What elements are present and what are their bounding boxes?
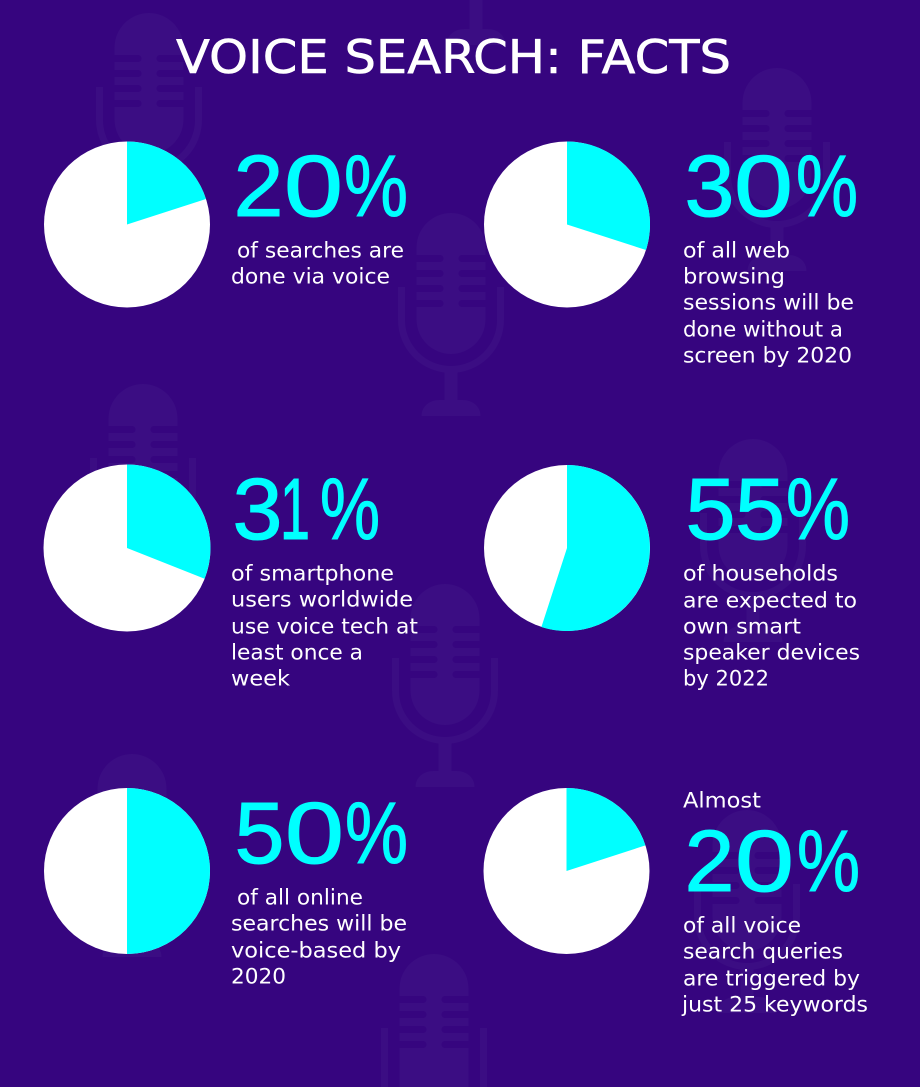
- description: smartphone users: of smartphone: [231, 562, 394, 587]
- description: voice-based searches: [231, 886, 407, 990]
- description: smartphone users: [231, 562, 418, 692]
- description: smart speakers: speaker devices: [683, 641, 860, 666]
- stat: 55%: %: [786, 461, 850, 558]
- description: keywords: search queries: [683, 940, 843, 965]
- lead-in: Almost: Almost: [683, 789, 761, 814]
- description: keywords: are triggered by: [683, 967, 860, 992]
- title: VOICE SEARCH: FACTS: [176, 30, 731, 84]
- pie chart: 55%: [484, 465, 650, 631]
- panel: 20% of searches: [44, 138, 408, 308]
- description: screenless browsing: screen by 2020: [683, 344, 852, 369]
- stat: 31%: %: [320, 461, 380, 558]
- description: voice-based searches: voice-based by: [231, 939, 401, 964]
- description: smart speakers: of households: [683, 562, 838, 587]
- description: smartphone users: use voice tech at: [231, 615, 418, 640]
- stat: 20% of queries: 2: [684, 813, 734, 910]
- stat: 50%: %: [345, 785, 408, 882]
- description: smart speakers: [683, 562, 860, 692]
- stat: 20%: 2: [234, 138, 284, 235]
- stat: 31%: 3: [232, 461, 282, 558]
- stat: 30%: 3: [684, 138, 734, 235]
- description: keywords: just 25 keywords: [681, 993, 868, 1018]
- stat: 20% of queries: 0: [735, 813, 794, 910]
- stat: 50%: 0: [285, 785, 344, 882]
- stat: 30%: %: [796, 138, 858, 235]
- description: smart speakers: own smart: [683, 615, 801, 640]
- description: smart speakers: are expected to: [683, 589, 857, 614]
- description: screenless browsing: done without a: [683, 318, 843, 343]
- description: screenless browsing: of all web: [683, 239, 790, 264]
- description: smartphone users: week: [231, 667, 291, 692]
- description: voice-based searches: of all online: [237, 886, 363, 911]
- description: keywords: of all voice: [683, 914, 801, 939]
- description: voice-based searches: 2020: [231, 965, 286, 990]
- pie chart: 20% of queries: [484, 788, 650, 954]
- stat: 30%: 0: [734, 138, 793, 235]
- description: screenless browsing: browsing: [683, 265, 785, 290]
- panel: 30% of web browsing: [484, 138, 858, 369]
- description: searches via voice: done via voice: [231, 265, 390, 290]
- description: keywords: [681, 914, 868, 1018]
- description: voice-based searches: searches will be: [231, 912, 407, 937]
- stat: 31%: 1: [280, 461, 310, 558]
- pie chart: 30%: [484, 142, 650, 308]
- pie chart: 31%: [44, 464, 210, 632]
- description: smartphone users: least once a: [231, 641, 363, 666]
- description: screenless browsing: [683, 239, 854, 369]
- panel: 31% of smartphone users: [44, 461, 418, 692]
- stat: 20%: 0: [284, 138, 343, 235]
- description: searches via voice: [231, 239, 404, 290]
- description: smartphone users: users worldwide: [231, 588, 413, 613]
- stat: 55%: 5: [686, 461, 736, 558]
- stat: 20% of queries: %: [797, 813, 860, 910]
- stat: 55%: 5: [735, 461, 785, 558]
- panel: almost 20% of queries: [484, 788, 868, 1018]
- panel: 55% of households: [484, 461, 860, 692]
- stat: 20%: %: [344, 138, 408, 235]
- pie chart: 50%: [44, 788, 210, 954]
- panel: 50% of online searches: [44, 785, 408, 990]
- description: smart speakers: by 2022: [683, 667, 769, 692]
- description: searches via voice: of searches are: [237, 239, 404, 264]
- stat: 50%: 5: [234, 785, 284, 882]
- description: screenless browsing: sessions will be: [683, 291, 854, 316]
- pie chart: 20%: [44, 142, 210, 308]
